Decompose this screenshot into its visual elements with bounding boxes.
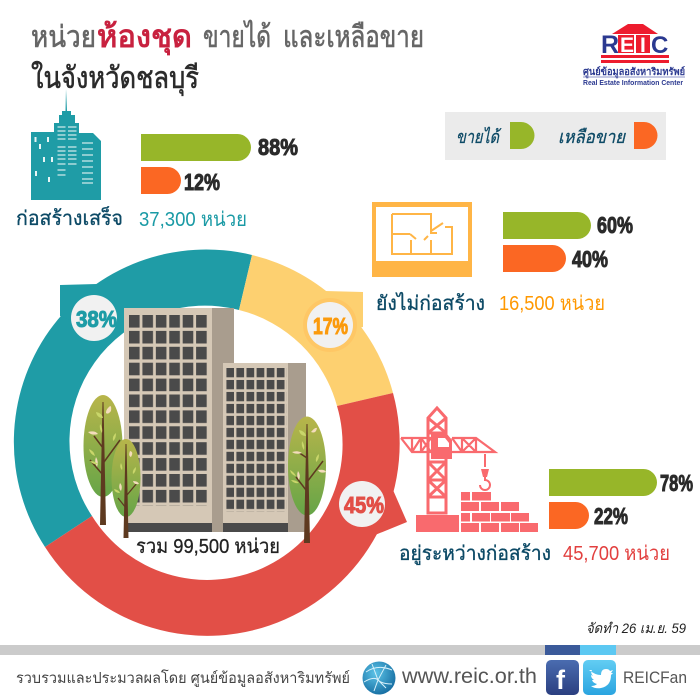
title: ห้องชุด [97, 19, 192, 56]
badge: 45% [339, 481, 385, 527]
segment: 38% built [14, 250, 252, 547]
bar: remaining 22% [549, 502, 589, 529]
icon: tree left [84, 395, 124, 525]
donut chart [14, 250, 407, 636]
units: 37,300: 37,300 หน่วย [139, 209, 247, 231]
panel: legend: เหลือขาย [558, 127, 626, 147]
panel: built [16, 89, 298, 231]
footer bar [0, 645, 700, 655]
bar: remaining 40% [503, 245, 566, 272]
value: 22%: 22% [594, 503, 628, 529]
title: และเหลือขาย [283, 21, 424, 54]
date note: จัดทำ 26 เม.ย. 59 [586, 620, 686, 636]
icon: small building [223, 363, 306, 532]
icon: large building [124, 308, 234, 532]
badge: 17%: 17% [313, 313, 348, 339]
icon: skyscraper [31, 89, 101, 200]
panel: not yet built [372, 202, 633, 315]
footer [0, 645, 700, 695]
bar: sold 88% [141, 134, 251, 161]
logo: REIC [583, 24, 685, 87]
social name: REICFan [623, 668, 687, 687]
logo: REIC: E [620, 34, 634, 57]
credit text: รวบรวมและประมวลผลโดย ศูนย์ข้อมูลอสังหาริมทรัพย์ [16, 669, 350, 687]
label: under construction: อยู่ระหว่างก่อสร้าง [399, 543, 551, 566]
bar: sold 60% [503, 212, 591, 239]
value: 40%: 40% [572, 246, 608, 272]
logo: REIC: Real Estate Information Center [583, 80, 683, 87]
icon: tree right [288, 416, 326, 543]
logo: REIC: C [651, 32, 668, 59]
bar: remaining 12% [141, 167, 181, 194]
donut centre total: รวม 99,500 หน่วย [136, 536, 280, 558]
label: built: ก่อสร้างเสร็จ [16, 205, 123, 230]
badge: 17% [303, 298, 357, 352]
panel: legend [445, 112, 666, 160]
title: หน่วย [31, 21, 96, 54]
title: ในจังหวัดชลบุรี [31, 61, 199, 97]
segment: 45% under construction [45, 393, 407, 636]
icon: facebook [546, 660, 579, 695]
badge: 38%: 38% [76, 306, 117, 332]
bar: sold 78% [549, 469, 657, 496]
icon: globe [362, 662, 396, 694]
badge: 38% [71, 295, 117, 341]
icon: crane and bricks [401, 408, 538, 532]
logo: REIC: R [601, 31, 619, 59]
value: 60%: 60% [597, 212, 633, 238]
value: 12%: 12% [184, 169, 220, 195]
icon: floor plan [372, 202, 472, 277]
logo: REIC: ศูนย์ข้อมูลอสังหาริมทรัพย์ [583, 66, 685, 79]
badge: 45%: 45% [344, 492, 384, 518]
icon: twitter [583, 660, 616, 695]
title: ขายได้ [203, 19, 271, 54]
value: 88%: 88% [258, 134, 298, 160]
title [31, 19, 424, 97]
logo: REIC: I [640, 34, 646, 57]
label: not yet built: ยังไม่ก่อสร้าง [376, 292, 485, 315]
icon: tree middle [112, 439, 140, 538]
segment: 17% not yet built [239, 255, 393, 406]
website: www.reic.or.th [401, 665, 537, 688]
units: 16,500: 16,500 หน่วย [499, 293, 605, 315]
panel: legend: ขายได้ [456, 126, 502, 147]
panel: under construction [399, 408, 693, 566]
units: 45,700: 45,700 หน่วย [563, 543, 670, 565]
icon: facebook: f [556, 665, 566, 695]
